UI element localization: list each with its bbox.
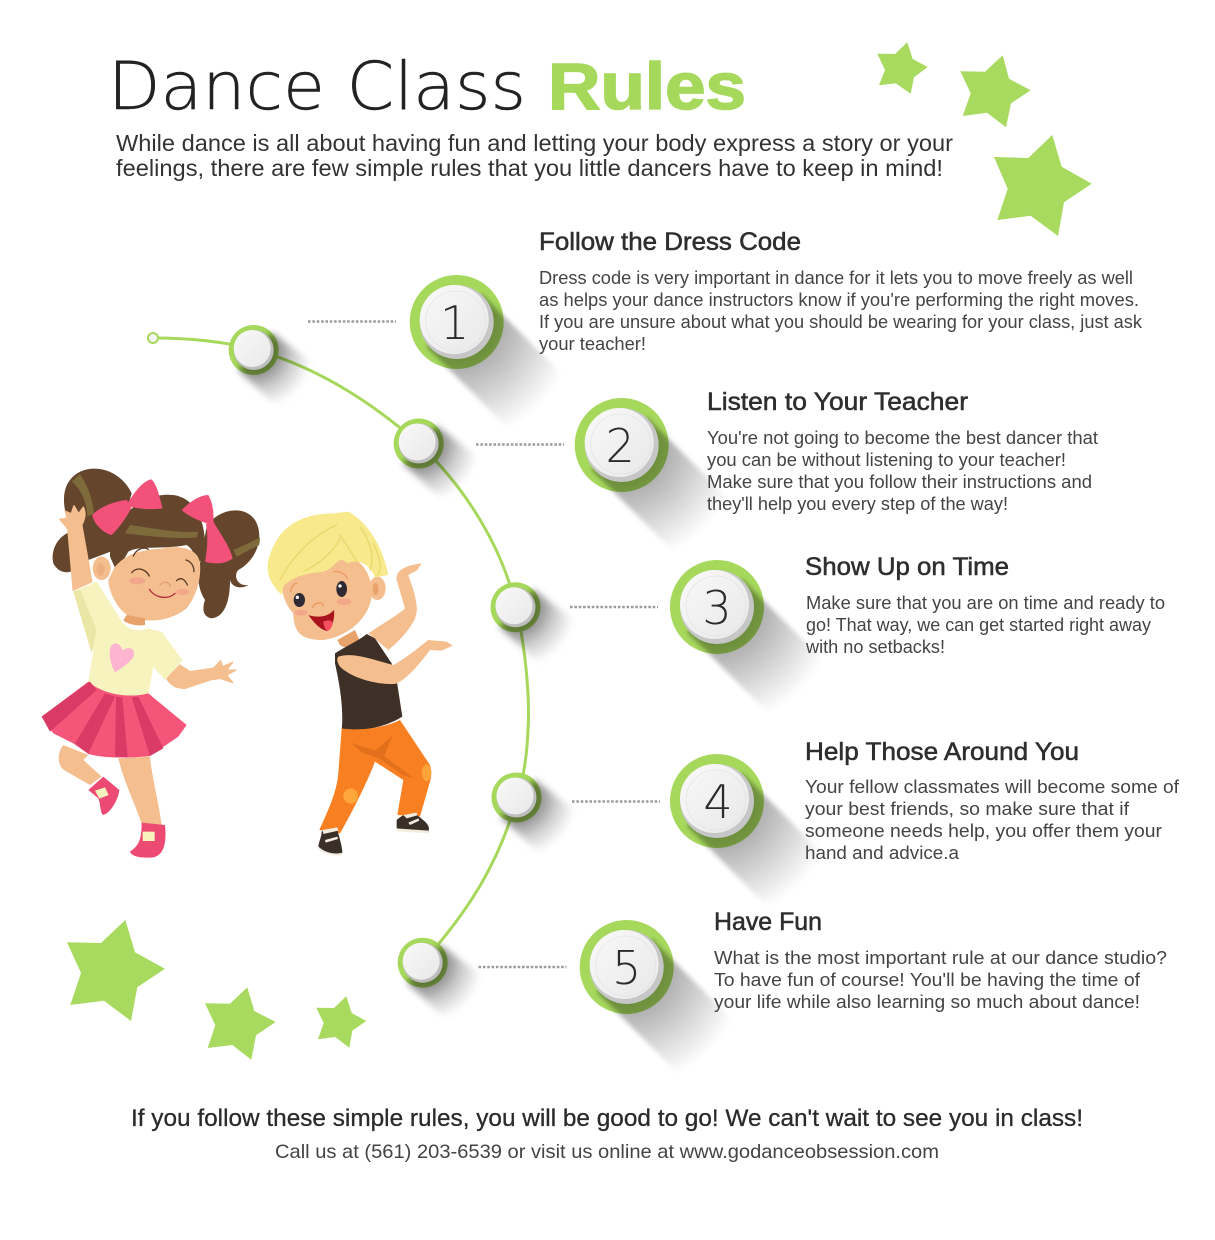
- body 1: Dress code is very important in dance for it lets you to move freely as well: [539, 268, 1133, 288]
- number badge 5: [580, 920, 761, 1102]
- body 4: your best friends, so make sure that if: [805, 799, 1130, 819]
- intro text: feelings, there are few simple rules that you little dancers have to keep in mind!: [116, 155, 943, 181]
- panel: rule 1: [410, 228, 1143, 457]
- body 2: they'll help you every step of the way!: [707, 494, 1008, 514]
- body 3: Make sure that you are on time and ready to: [806, 593, 1165, 613]
- timeline node 3: [490, 582, 586, 675]
- number badge 3: [670, 560, 851, 742]
- heading 1: Follow the Dress Code: [539, 228, 801, 256]
- heading 4: Help Those Around You: [805, 738, 1079, 766]
- panel: rule 2: [575, 388, 1098, 580]
- number badge 2: 2: [606, 419, 635, 473]
- heading 2: Listen to Your Teacher: [707, 388, 968, 416]
- body 1: [539, 268, 1143, 354]
- number badge 1: [410, 275, 591, 457]
- heading 5: Have Fun: [714, 908, 822, 936]
- number badge 3: 3: [702, 581, 732, 635]
- title: Rules: [548, 49, 746, 123]
- panel: rule 4: [670, 738, 1180, 936]
- number badge 5: 5: [612, 941, 641, 995]
- number badge 4: 4: [703, 775, 733, 829]
- body 3: with no setbacks!: [805, 637, 945, 657]
- body 2: [707, 428, 1098, 514]
- intro text: While dance is all about having fun and letting your body express a story or your: [116, 130, 953, 156]
- body 5: your life while also learning so much about dance!: [714, 992, 1140, 1012]
- body 5: [714, 948, 1167, 1012]
- timeline curve: [148, 333, 528, 963]
- title: Dance Class: [108, 48, 526, 125]
- body 3: go! That way, we can get started right away: [806, 615, 1151, 635]
- body 1: as helps your dance instructors know if you're performing the right moves.: [539, 290, 1139, 310]
- number badge 2: [575, 398, 756, 580]
- timeline node 1: [229, 325, 324, 418]
- body 4: hand and advice.a: [805, 843, 960, 863]
- body 4: Your fellow classmates will become some of: [805, 777, 1180, 797]
- number badge 4: [670, 754, 851, 936]
- timeline node 4: [492, 772, 586, 866]
- stars: top right: [877, 42, 1092, 236]
- body 2: you can be without listening to your teacher!: [707, 450, 1066, 470]
- body 3: [805, 593, 1165, 657]
- body 5: What is the most important rule at our dance studio?: [714, 948, 1167, 968]
- number badge 1: 1: [440, 296, 469, 350]
- illustration: girl dancing: [42, 469, 260, 858]
- body 2: You're not going to become the best dancer that: [707, 428, 1098, 448]
- panel: rule 5: [580, 908, 1167, 1102]
- intro text: [116, 130, 953, 181]
- footer: If you follow these simple rules, you will be good to go! We can't wait to see you in class!: [131, 1105, 1083, 1132]
- illustration: boy dancing: [268, 512, 453, 856]
- title: [108, 48, 746, 125]
- timeline node 5: [398, 938, 493, 1031]
- panel: rule 3: [670, 553, 1165, 742]
- timeline node 2: [394, 418, 489, 512]
- dotted connectors: [308, 322, 660, 967]
- body 1: your teacher!: [539, 334, 646, 354]
- body 5: To have fun of course! You'll be having the time of: [714, 970, 1141, 990]
- body 4: [805, 777, 1180, 863]
- footer: Call us at (561) 203-6539 or visit us online at www.godanceobsession.com: [275, 1141, 939, 1163]
- footer: [131, 1105, 1083, 1163]
- body 4: someone needs help, you offer them your: [805, 821, 1162, 841]
- body 2: Make sure that you follow their instructions and: [707, 472, 1092, 492]
- body 1: If you are unsure about what you should be wearing for your class, just ask: [539, 312, 1143, 332]
- heading 3: Show Up on Time: [805, 553, 1009, 581]
- stars: bottom left: [67, 920, 366, 1060]
